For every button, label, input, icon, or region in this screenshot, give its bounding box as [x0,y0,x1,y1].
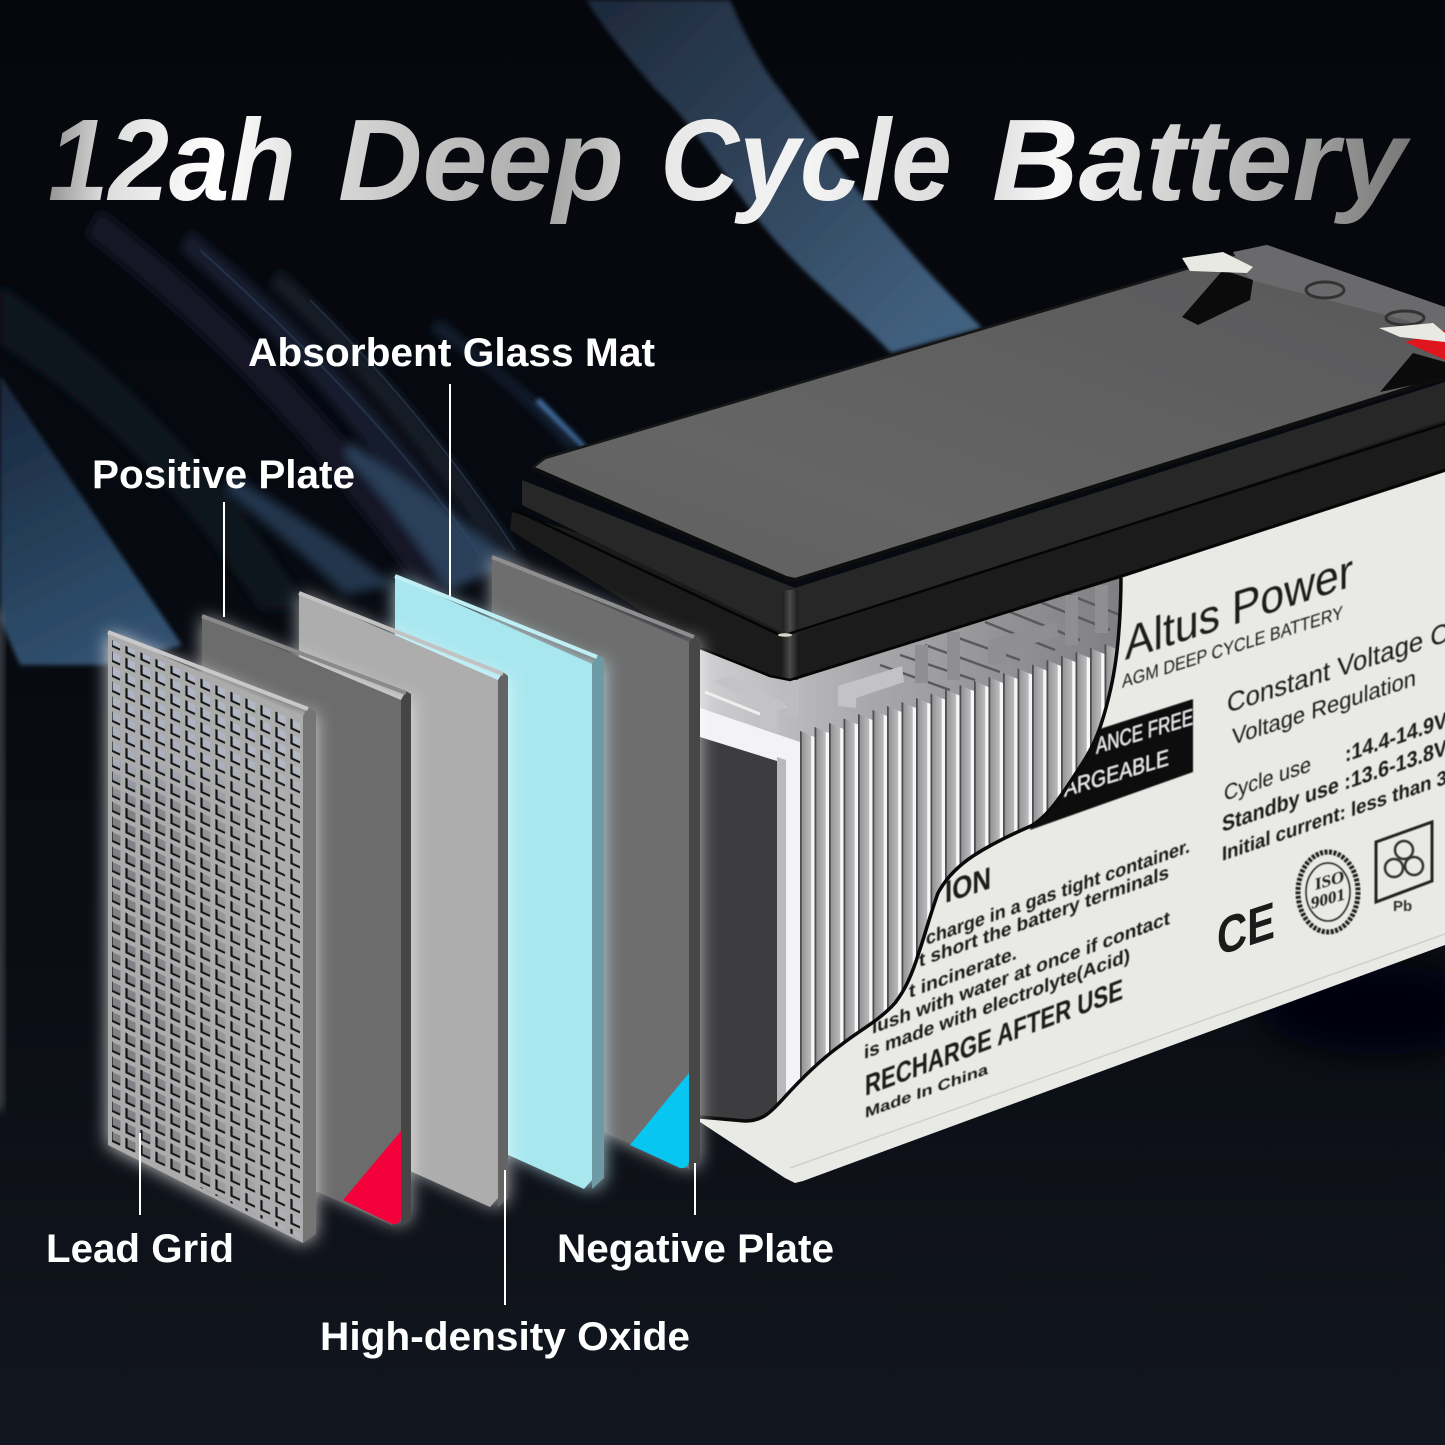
left blue wedge [0,375,182,665]
label: caution text: lush with water at once if contact [872,907,1170,1039]
callout: Positive Plate: Positive Plate [92,453,355,497]
plate: positive plate [202,616,411,1225]
icon: ISO 9001 seal: ISO [1315,867,1344,894]
label: caution text: RECHARGE AFTER USE [865,973,1123,1103]
label: charging specification: Voltage Regulation [1232,665,1416,750]
label: black feature box [1030,699,1193,830]
label: caution text: Made In China [865,1061,988,1122]
callout: Lead Grid: Lead Grid [46,1227,234,1271]
label: brand: Altus Power [1125,544,1353,671]
label: caution text: t incinerate. [909,942,1017,1003]
label: charging specification: Cycle use [1224,752,1311,806]
left edge haze [0,610,3,1110]
title: Deep [338,95,624,225]
blue swoosh top centre [586,0,982,353]
plate: negative plate [492,557,700,1169]
title: Cycle [660,95,952,225]
label: caution text [864,836,1190,1122]
cutaway: internal plate stack [700,570,1130,1130]
terminal left [1182,252,1253,325]
label: caution text: charge in a gas tight container. [926,836,1190,950]
plate stripes with stepped tops [800,644,1116,1078]
icon: CE mark: CE [1217,891,1275,968]
label: black feature box: ARGEABLE [1064,744,1169,802]
icon: ISO 9001 seal: 9001 [1311,885,1345,913]
grid mesh [112,640,300,1238]
icon: ISO 9001 seal [1298,852,1358,932]
dark slits between plates [880,593,1120,690]
label: caution text: t short the battery terminals [919,861,1169,972]
negative corner: cyan [630,1073,689,1168]
battery illustration [510,245,1445,1183]
label: caution text: ION [945,860,991,910]
plate: high-density oxide [299,593,508,1207]
connector straps and posts [712,585,1108,733]
fan streaks [0,210,587,610]
label: charging specification [1222,617,1445,866]
end plate white frame [700,708,800,1130]
callout: Absorbent Glass Mat: Absorbent Glass Mat [248,331,655,375]
title: 12ah [48,95,296,225]
lower blur blobs [1260,965,1445,1055]
terminals and wires [1182,245,1445,392]
white label body with printed text [700,400,1445,1183]
label: caution text: is made with electrolyte(Acid) [864,945,1130,1064]
plate: lead grid [108,632,316,1243]
callout: High-density Oxide: High-density Oxide [320,1315,690,1359]
positive corner: red [343,1131,401,1224]
label: brand: AGM DEEP CYCLE BATTERY [1122,603,1343,693]
callout: Negative Plate: Negative Plate [557,1227,834,1271]
terminal right with red wire [1379,323,1445,392]
icon: recycling symbol [1376,822,1432,915]
title: Battery [992,95,1412,225]
icon: recycling symbol: Pb [1393,898,1412,915]
battery lid [510,245,1445,680]
title [48,95,1412,225]
label: black feature box: ANCE FREE [1096,704,1193,759]
end plate dark panel [700,737,777,1130]
plate: absorbent glass mat [395,576,604,1189]
